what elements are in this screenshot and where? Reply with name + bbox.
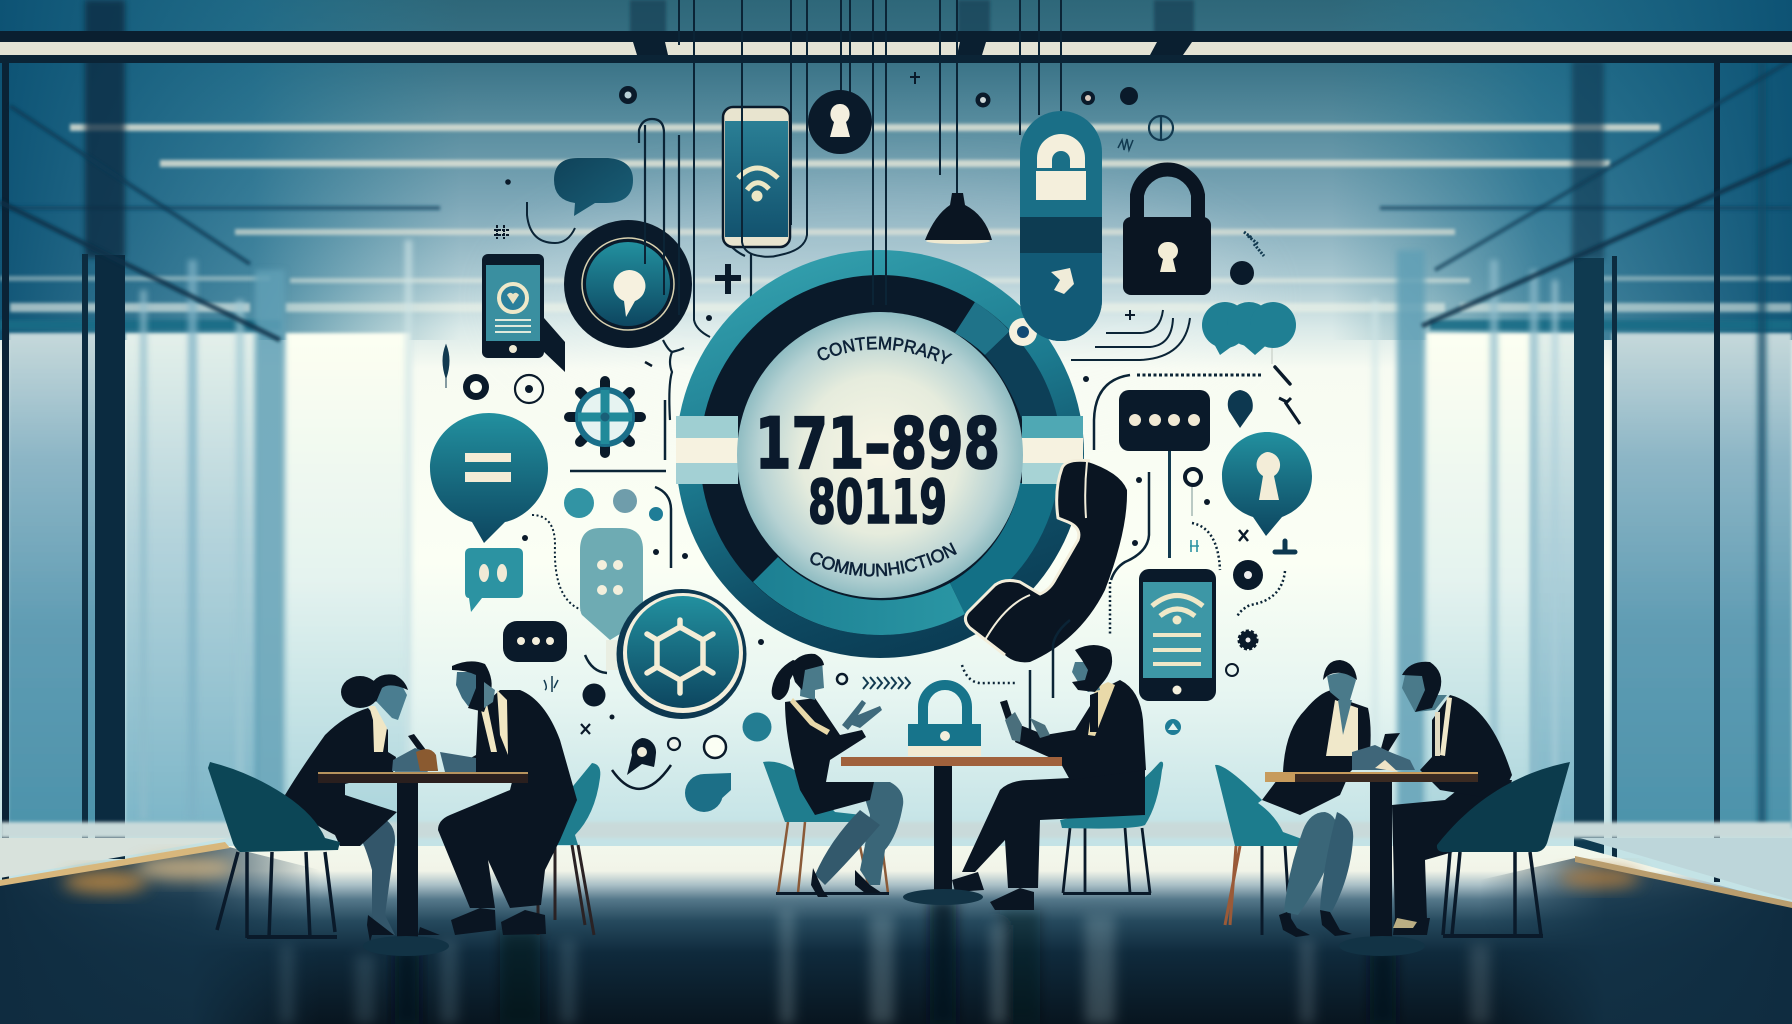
curved label: COMMUNHICTION: COMMUNHICTION [810, 542, 957, 577]
man chair [520, 763, 600, 935]
icon: small teal chat bubble [465, 548, 523, 612]
icon: paperclip cords and vines [639, 119, 762, 420]
icon: pale teal tall bubble [580, 528, 643, 670]
translucent window pillars [140, 60, 1766, 830]
table [318, 772, 528, 956]
icon: smartphone left [482, 254, 565, 372]
horizontal band right [1022, 416, 1083, 484]
icon: keyhole badge top [808, 90, 872, 154]
ceiling light stripes [0, 124, 1792, 330]
phones and hands [392, 734, 476, 772]
woman figure [1262, 660, 1371, 937]
table [1265, 772, 1478, 956]
hanging cords over ring [873, 0, 886, 305]
phone number line one: 171–898 [755, 403, 1000, 485]
icon: gear wheel [569, 381, 641, 453]
icon: plus [715, 264, 741, 294]
curved label: CONTEMPRARY: CONTEMPRARY [817, 336, 953, 364]
woman chair [763, 762, 889, 895]
man figure [1392, 662, 1512, 935]
hanging cords [679, 0, 1061, 337]
icon: black padlock [1123, 170, 1211, 295]
right chair [1060, 762, 1163, 895]
floor [0, 822, 1792, 1024]
table [841, 757, 1062, 905]
horizontal band left [676, 416, 738, 484]
group 1: left table [208, 661, 600, 956]
icon: smartphone with wifi right [1139, 569, 1216, 701]
lower-left small icons [544, 674, 910, 812]
top ceiling rail [0, 0, 1792, 63]
icon: black ring with chat bubble [564, 125, 692, 348]
icon: hexagon badge [616, 589, 746, 719]
phone number line two: 80119 [808, 467, 947, 538]
small left marks [443, 315, 712, 403]
woman figure [285, 674, 440, 942]
icon: teal pill with lock [1020, 111, 1102, 341]
central ring graphic [676, 0, 1084, 658]
teal dots cluster [522, 488, 764, 645]
icon: black typing bubble [503, 621, 567, 662]
icon: teardrop pin [1228, 390, 1253, 428]
connector lines left of ring [532, 400, 671, 673]
phone and hands [1352, 733, 1415, 772]
group 2: centre table [763, 645, 1163, 910]
woman chair [1215, 765, 1310, 935]
woman figure [772, 654, 903, 897]
icon: telephone handset [965, 460, 1127, 662]
woman chair [208, 762, 340, 939]
ring knob [1009, 318, 1037, 346]
group 3: right table [1215, 660, 1570, 956]
dark chair [1437, 762, 1570, 938]
icon: teal heart bubbles [1202, 302, 1296, 355]
small dots along the top [619, 72, 1173, 150]
upper-right small marks [1083, 232, 1300, 424]
man figure [438, 661, 577, 935]
icon: black dots message box [1119, 390, 1210, 558]
icon: hanging phone with wifi [723, 0, 790, 256]
icon: large teal speech bubble [430, 413, 548, 543]
icon: keyhole map pin [1222, 432, 1312, 536]
icon: hanging lamp [925, 193, 992, 244]
man figure [952, 645, 1146, 910]
window frame: right columns and beams [1422, 60, 1792, 882]
icon: dark speech bubble [494, 158, 633, 243]
small right marks [1132, 469, 1295, 735]
window frame: left columns and beams [0, 0, 280, 880]
floor reflections [280, 900, 1490, 1024]
icon: teal padlock on table [908, 685, 981, 756]
connector lines right of ring [962, 310, 1285, 730]
